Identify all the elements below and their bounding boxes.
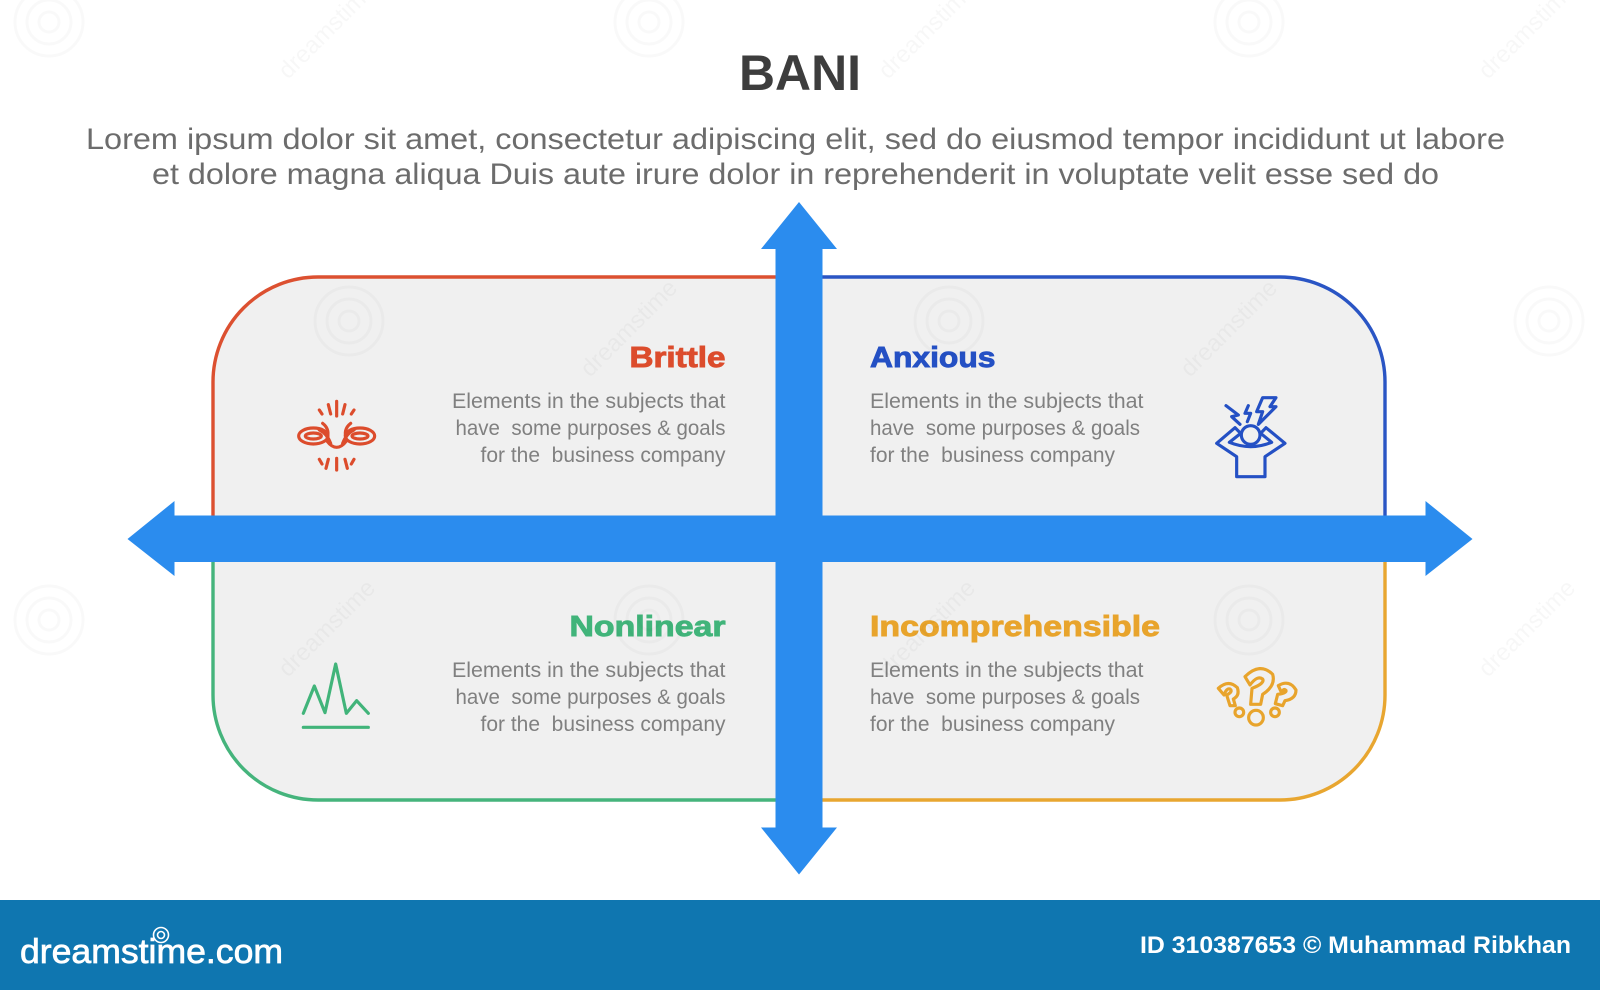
footer bar	[0, 900, 1600, 990]
text block: Anxious description: for the business company	[870, 443, 1115, 467]
text block: Brittle description	[452, 389, 726, 467]
text block: Anxious description: Elements in the subjects that	[870, 389, 1144, 413]
text block: Nonlinear description	[452, 658, 726, 736]
icon: stressed person	[1217, 398, 1285, 477]
panel: Nonlinear	[213, 539, 800, 800]
text: dreamstime	[273, 574, 381, 682]
footer logo: dreamstime.com	[20, 933, 283, 971]
text block: Incomprehensible description	[870, 658, 1144, 736]
subtitle text	[86, 123, 1505, 191]
heading: Incomprehensible: Incomprehensible	[870, 611, 1160, 643]
matrix background panel	[213, 277, 1385, 800]
icon: broken chain	[299, 401, 375, 470]
footer credit: ID 310387653 © Muhammad Ribkhan	[1140, 932, 1571, 959]
text block: Brittle description: Elements in the subjects that	[452, 389, 726, 413]
text: dreamstime	[873, 574, 981, 682]
title: BANI	[739, 45, 861, 101]
text block: Brittle description: have some purposes & goals	[456, 416, 726, 440]
text block: Nonlinear description: Elements in the subjects that	[452, 658, 726, 682]
subtitle text: et dolore magna aliqua Duis aute irure dolor in reprehenderit in voluptate velit esse sed do	[152, 158, 1439, 191]
panel: Incomprehensible	[800, 539, 1385, 800]
heading: Anxious: Anxious	[870, 342, 996, 374]
arrow: horizontal double-headed	[128, 501, 1472, 576]
heading: Brittle: Brittle	[630, 342, 726, 374]
text: dreamstime	[1175, 274, 1283, 382]
text block: Brittle description: for the business company	[480, 443, 726, 467]
heading: Nonlinear: Nonlinear	[570, 611, 726, 643]
text block: Incomprehensible description: Elements in the subjects that	[870, 658, 1144, 682]
text: dreamstime	[1473, 574, 1581, 682]
icon: jagged line chart	[303, 664, 368, 727]
text block: Nonlinear description: have some purposes & goals	[456, 685, 726, 709]
text: dreamstime	[575, 274, 683, 382]
panel: Anxious	[800, 277, 1385, 539]
icon: question marks	[1218, 669, 1296, 725]
text block: Nonlinear description: for the business company	[480, 712, 726, 736]
text block: Anxious description: have some purposes & goals	[870, 416, 1140, 440]
text block: Incomprehensible description: for the business company	[870, 712, 1115, 736]
panel: Brittle	[213, 277, 800, 539]
arrow: vertical double-headed	[761, 202, 837, 874]
text block: Anxious description	[870, 389, 1144, 467]
text block: Incomprehensible description: have some purposes & goals	[870, 685, 1140, 709]
subtitle text: Lorem ipsum dolor sit amet, consectetur adipiscing elit, sed do eiusmod tempor incididunt ut labore	[86, 123, 1505, 156]
